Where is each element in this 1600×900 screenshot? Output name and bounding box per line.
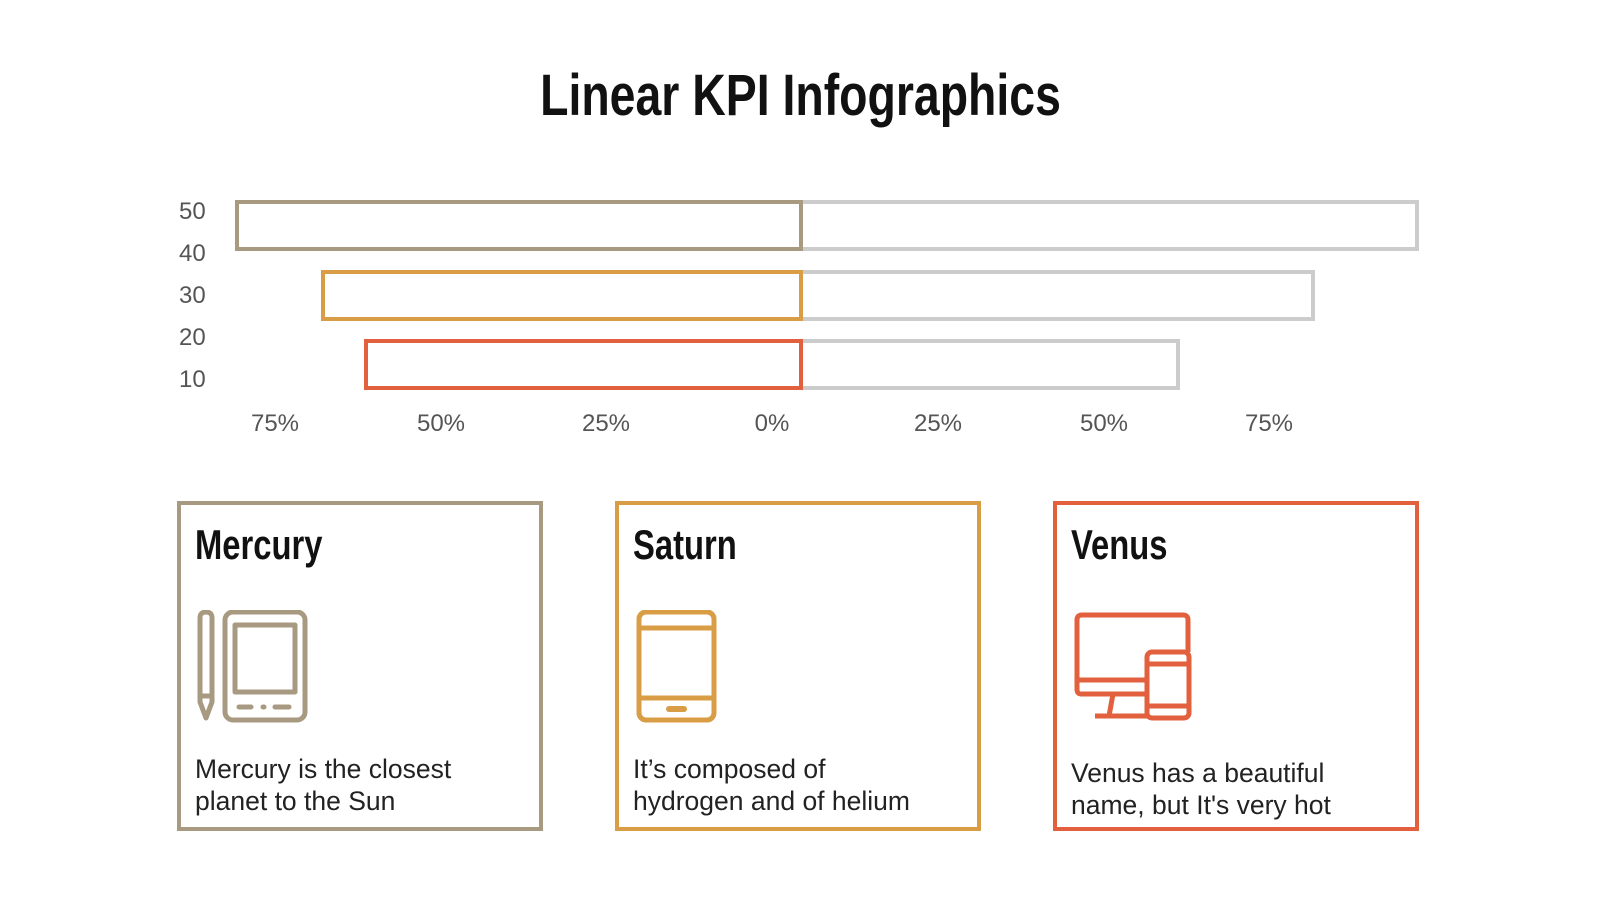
icon: tablet and pen [198,610,308,722]
panel: Venus [1053,501,1419,831]
x axis labels: 25% [914,410,962,437]
panel: Mercury: Mercury is the closest [195,754,451,784]
panel: Saturn: Saturn [633,521,737,568]
y axis labels: 20 [179,324,206,351]
x axis labels: 0% [755,410,789,437]
title: Linear KPI Infographics [540,63,1060,128]
bar chart [235,200,1419,390]
panel: Saturn: It’s composed of [633,754,825,784]
y axis labels: 10 [179,366,206,393]
icon: desktop and phone [1074,612,1192,720]
y axis labels: 30 [179,282,206,309]
x axis labels: 25% [582,410,630,437]
x axis labels: 75% [251,410,299,437]
x axis labels: 75% [1245,410,1293,437]
y axis labels [179,198,206,393]
panel: Venus: Venus has a beautiful [1071,758,1324,788]
y axis labels: 40 [179,240,206,267]
panel: Saturn [615,501,981,831]
x axis labels: 50% [417,410,465,437]
panel: Mercury: Mercury [195,521,322,568]
panel: Venus: name, but It's very hot [1071,790,1331,820]
icon: phone [636,610,716,722]
panel: Mercury: planet to the Sun [195,786,395,816]
panel: Mercury [177,501,543,831]
x axis labels [251,410,1293,437]
x axis labels: 50% [1080,410,1128,437]
panel: Venus: Venus [1071,521,1168,568]
panel: Saturn: hydrogen and of helium [633,786,910,816]
y axis labels: 50 [179,198,206,225]
